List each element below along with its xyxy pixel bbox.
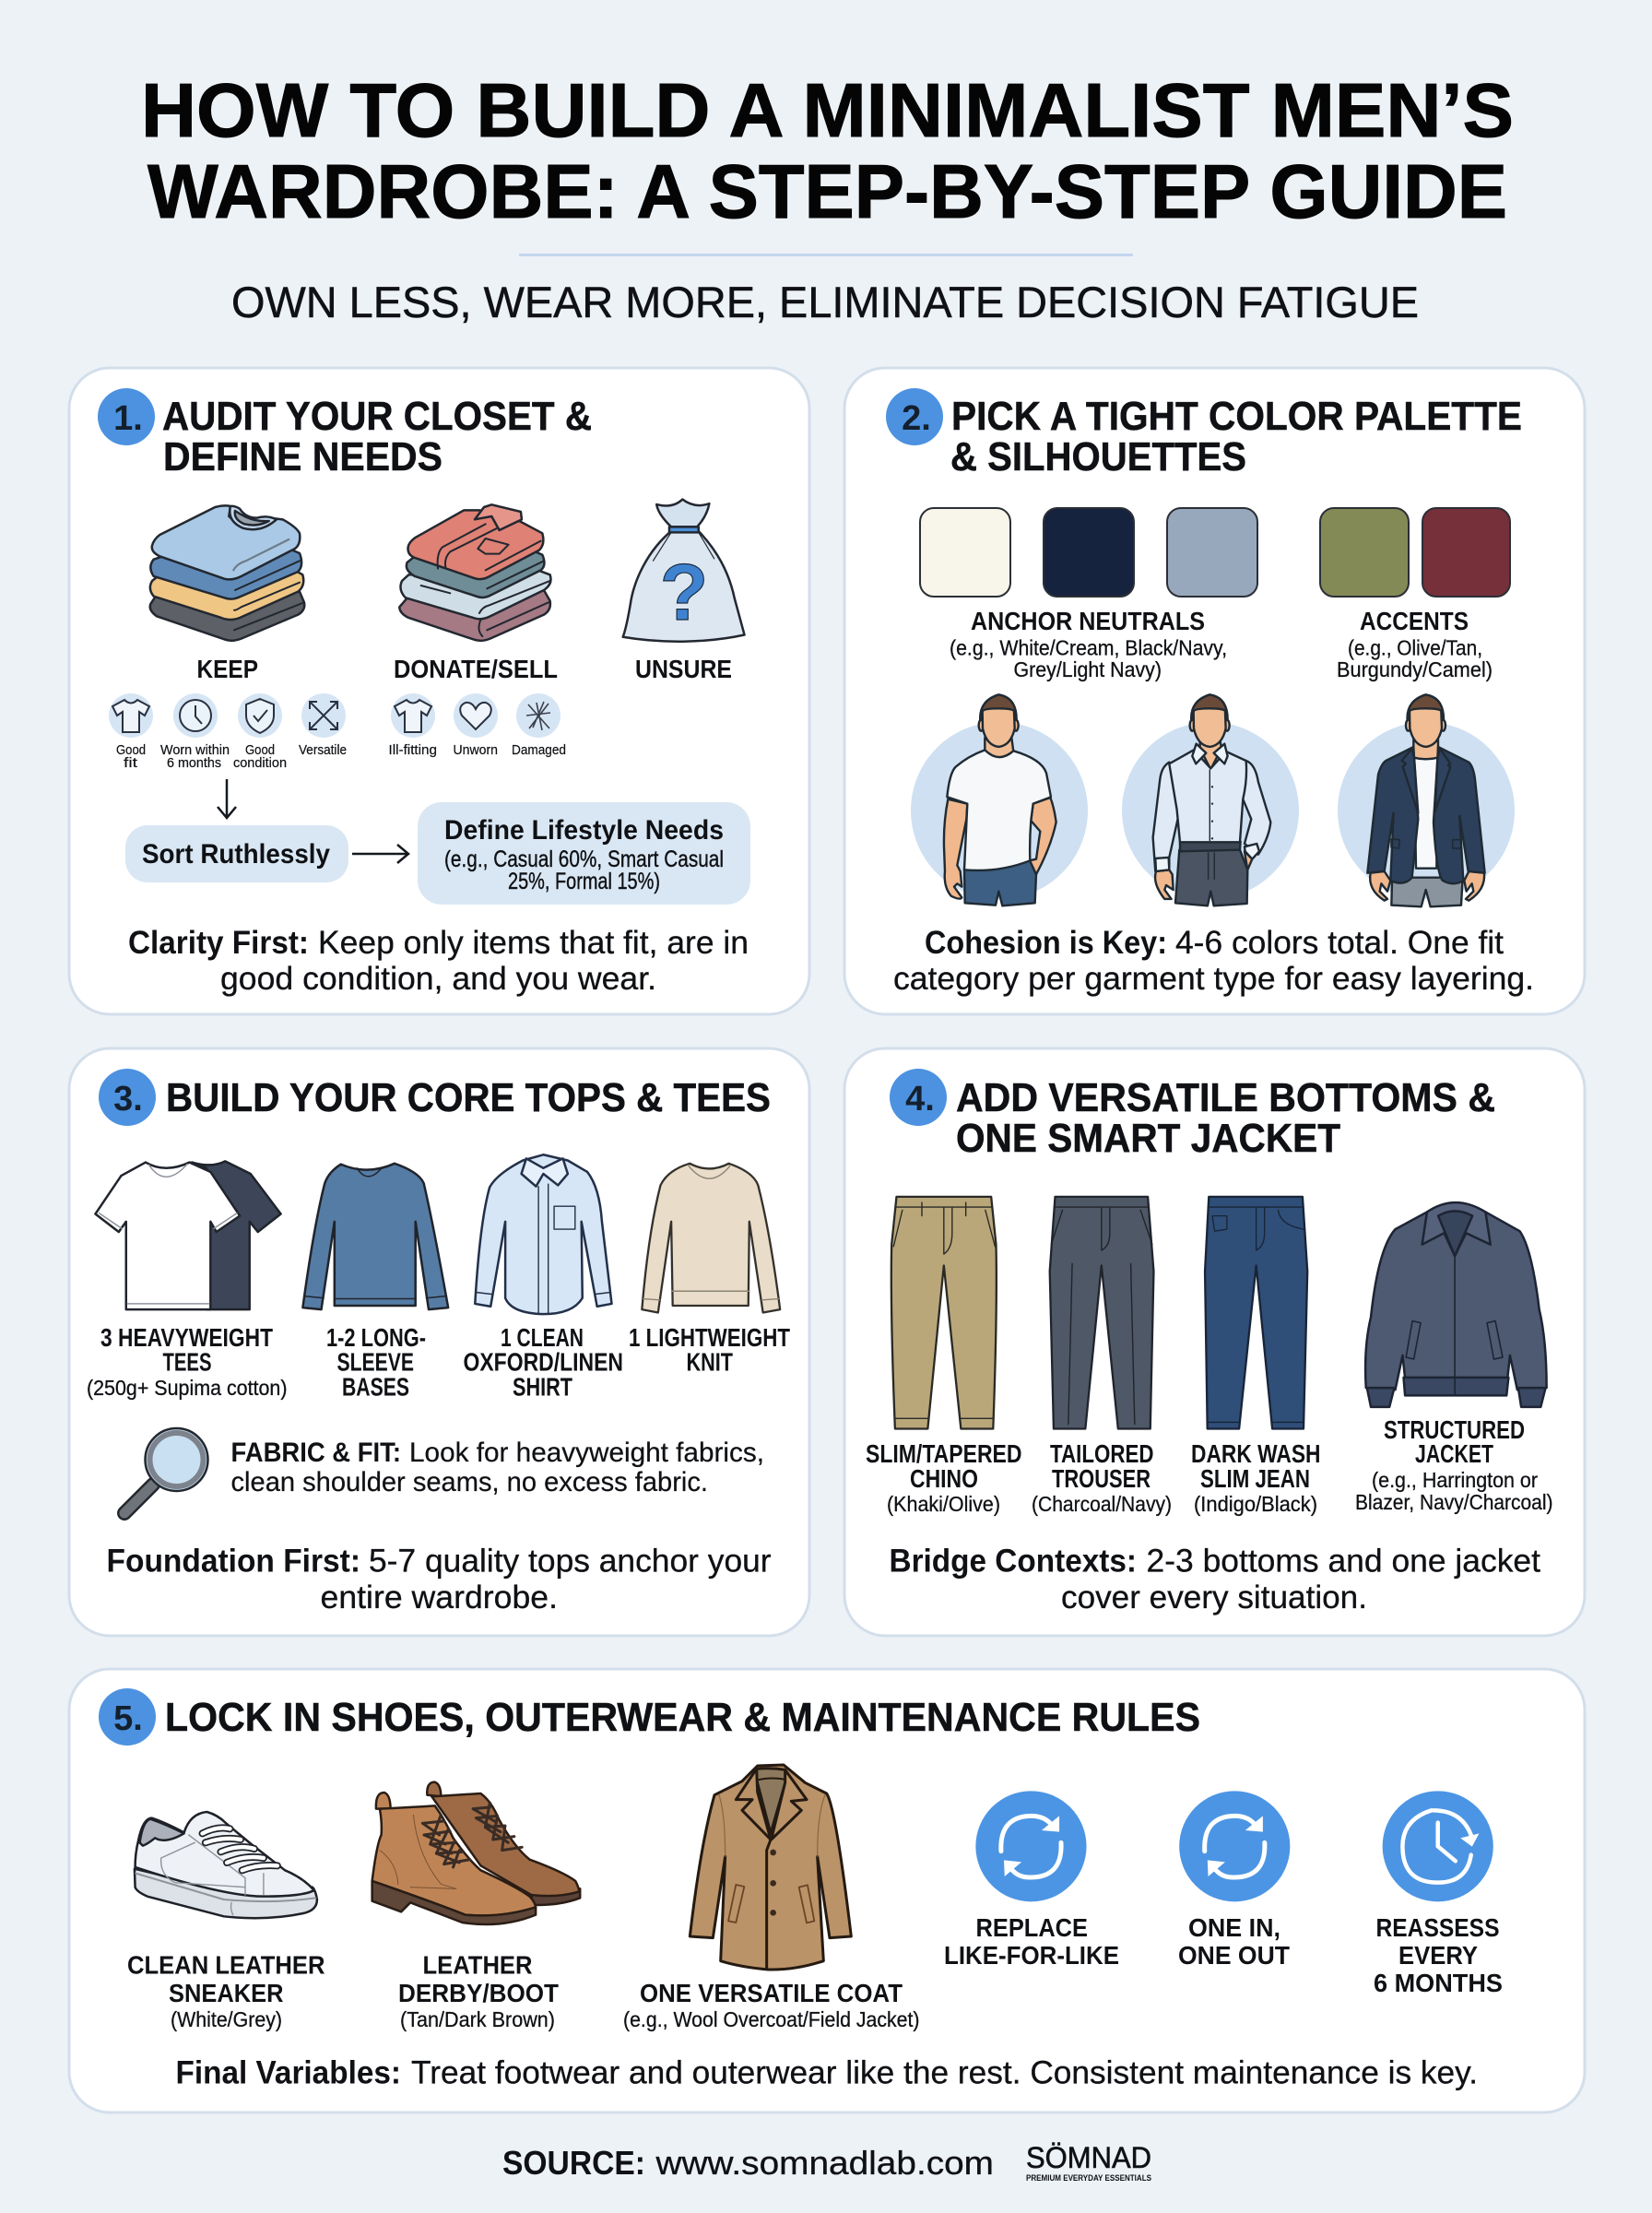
define lifestyle needs box xyxy=(418,802,750,905)
figure: casual tee xyxy=(911,694,1088,905)
panel 4 takeaway: cover every situation. xyxy=(1061,1580,1367,1615)
panel 1 takeaway: good condition, and you wear. xyxy=(220,961,656,997)
anchor neutrals label: ANCHOR NEUTRALS xyxy=(971,607,1205,635)
chino labels xyxy=(866,1439,1021,1516)
title: HOW TO BUILD A MINIMALIST MEN’S xyxy=(141,67,1514,153)
figure: blazer xyxy=(1338,694,1515,906)
brand logo: PREMIUM EVERYDAY ESSENTIALS xyxy=(1026,2173,1151,2183)
step 3 badge xyxy=(99,1069,156,1126)
chino labels: (Khaki/Olive) xyxy=(887,1492,1000,1516)
panel 4 takeaway: 2-3 bottoms and one jacket xyxy=(1147,1544,1540,1579)
step 1 heading xyxy=(162,394,592,479)
garment: structured jacket xyxy=(1365,1202,1547,1407)
icon: good fit xyxy=(109,693,153,738)
jacket labels: JACKET xyxy=(1415,1439,1493,1468)
icon: replace like-for-like xyxy=(975,1791,1087,1901)
step 2 heading xyxy=(950,394,1522,479)
step 5 badge xyxy=(99,1688,156,1746)
title: WARDROBE: A STEP-BY-STEP GUIDE xyxy=(148,148,1507,234)
panel 2 takeaway: Cohesion is Key: xyxy=(925,925,1167,961)
jean labels: DARK WASH xyxy=(1191,1439,1320,1468)
panel 4 card xyxy=(844,1048,1585,1636)
subtitle: OWN LESS, WEAR MORE, ELIMINATE DECISION FATIGUE xyxy=(231,278,1419,326)
fabric and fit note xyxy=(230,1438,764,1497)
step 5 heading: LOCK IN SHOES, OUTERWEAR & MAINTENANCE RULES xyxy=(165,1695,1200,1740)
rule label: reassess: REASSESS xyxy=(1375,1913,1499,1942)
garment: heavyweight tees xyxy=(95,1161,281,1309)
long sleeve labels: BASES xyxy=(342,1372,409,1402)
define lifestyle needs box: (e.g., Casual 60%, Smart Casual xyxy=(444,846,724,872)
step 1 badge: 1. xyxy=(113,399,143,438)
panel 2 takeaway: 4-6 colors total. One fit xyxy=(1175,925,1504,961)
panel 1 takeaway: Keep only items that fit, are in xyxy=(318,925,749,961)
garment: oxford shirt xyxy=(475,1154,612,1314)
long sleeve labels xyxy=(326,1323,426,1402)
oxford labels: 1 CLEAN xyxy=(501,1323,584,1352)
coat labels: ONE VERSATILE COAT xyxy=(640,1979,903,2007)
rule label: one in one out xyxy=(1178,1913,1290,1970)
icon captions: 6 months xyxy=(167,756,221,771)
tee labels: TEES xyxy=(162,1348,212,1376)
chino labels: CHINO xyxy=(910,1464,978,1493)
icon captions: Versatile xyxy=(299,743,347,758)
icon captions: condition xyxy=(233,756,287,771)
icon captions: Good xyxy=(116,743,146,758)
boot labels: (Tan/Dark Brown) xyxy=(400,2007,555,2031)
panel 3 card xyxy=(69,1048,809,1636)
icon: unworn heart xyxy=(454,693,498,738)
panel 3 takeaway: entire wardrobe. xyxy=(321,1580,558,1615)
step 5 badge: 5. xyxy=(113,1699,143,1738)
accents label: Burgundy/Camel) xyxy=(1337,657,1493,681)
trouser labels xyxy=(1032,1439,1172,1516)
garment: long sleeve xyxy=(302,1164,448,1309)
tee labels: (250g+ Supima cotton) xyxy=(87,1376,288,1400)
step 4 badge xyxy=(890,1069,947,1126)
rule label: reassess: EVERY xyxy=(1398,1941,1478,1970)
icon: unsure bag xyxy=(623,500,745,642)
rule label: one in one out: ONE OUT xyxy=(1178,1941,1290,1970)
icon: one in one out xyxy=(1179,1791,1290,1901)
knit labels: 1 LIGHTWEIGHT xyxy=(629,1323,790,1352)
step 2 badge: 2. xyxy=(902,399,931,438)
panel: step 2 palette xyxy=(844,368,1585,1014)
rule label: replace: LIKE-FOR-LIKE xyxy=(944,1941,1119,1970)
trouser labels: TAILORED xyxy=(1050,1439,1154,1468)
icon: damaged xyxy=(516,693,560,738)
figure: smart shirt xyxy=(1122,694,1299,905)
panel 5 card xyxy=(69,1669,1585,2112)
step 2 heading: & SILHOUETTES xyxy=(950,434,1246,479)
boot labels: LEATHER xyxy=(422,1951,533,1979)
rule label: replace: REPLACE xyxy=(975,1913,1088,1942)
column labels xyxy=(197,655,732,683)
panel 3 takeaway: Foundation First: xyxy=(107,1544,360,1579)
step 4 badge: 4. xyxy=(905,1080,935,1118)
panel: step 3 tops xyxy=(69,1048,809,1636)
anchor neutrals label xyxy=(950,607,1227,681)
jacket labels xyxy=(1355,1415,1552,1514)
panel 1 takeaway: Clarity First: xyxy=(128,925,309,961)
garment: chino xyxy=(891,1197,997,1428)
icon: wool coat xyxy=(690,1765,851,1970)
boot labels: DERBY/BOOT xyxy=(398,1979,559,2007)
sneaker labels: CLEAN LEATHER xyxy=(127,1951,325,1979)
icon captions: Worn within xyxy=(160,743,230,758)
panel 1 card xyxy=(69,368,809,1014)
trouser labels: (Charcoal/Navy) xyxy=(1032,1492,1172,1516)
jacket labels: (e.g., Harrington or xyxy=(1372,1468,1538,1492)
anchor neutrals label: Grey/Light Navy) xyxy=(1014,657,1162,681)
boot labels xyxy=(398,1951,559,2031)
column labels: DONATE/SELL xyxy=(394,655,558,683)
step 4 heading xyxy=(956,1075,1495,1161)
icon: clock xyxy=(173,693,218,738)
step 1 heading: DEFINE NEEDS xyxy=(163,434,442,479)
icon: versatile arrows xyxy=(301,693,346,738)
column labels: UNSURE xyxy=(635,655,732,683)
sneaker labels: SNEAKER xyxy=(169,1979,284,2007)
rule label: one in one out: ONE IN, xyxy=(1188,1913,1280,1942)
column labels: KEEP xyxy=(197,655,258,683)
sneaker labels xyxy=(127,1951,325,2031)
icon captions: Damaged xyxy=(512,743,566,758)
jacket labels: Blazer, Navy/Charcoal) xyxy=(1355,1490,1552,1514)
step 4 heading: ONE SMART JACKET xyxy=(956,1116,1340,1161)
define lifestyle needs box: Define Lifestyle Needs xyxy=(444,815,724,846)
jacket labels: STRUCTURED xyxy=(1384,1415,1525,1444)
sneaker labels: (White/Grey) xyxy=(171,2007,282,2031)
panel 4 takeaway xyxy=(889,1544,1540,1615)
panel 1 takeaway xyxy=(128,925,749,997)
icon: magnifying glass xyxy=(124,1428,208,1513)
knit labels xyxy=(629,1323,790,1376)
accents label xyxy=(1337,607,1493,681)
panel 3 takeaway xyxy=(107,1544,772,1615)
rule label: reassess xyxy=(1374,1913,1503,1997)
icon captions xyxy=(116,743,566,771)
long sleeve labels: SLEEVE xyxy=(337,1348,414,1376)
panel: step 5 shoes and rules xyxy=(69,1669,1585,2112)
icon: shield xyxy=(238,693,282,738)
icon captions: Good xyxy=(245,743,275,758)
panel 2 takeaway xyxy=(893,925,1534,997)
jean labels: (Indigo/Black) xyxy=(1194,1492,1317,1516)
garment: knit xyxy=(642,1164,780,1312)
arrow: to lifestyle needs xyxy=(352,845,408,863)
icon: donate clothes stack xyxy=(399,504,550,641)
tee labels: 3 HEAVYWEIGHT xyxy=(100,1323,273,1352)
step 3 badge: 3. xyxy=(113,1080,143,1118)
panel 5 takeaway: Treat footwear and outerwear like the rest. Consistent maintenance is key. xyxy=(411,2054,1478,2091)
trouser labels: TROUSER xyxy=(1052,1464,1150,1493)
step 3 heading: BUILD YOUR CORE TOPS & TEES xyxy=(166,1075,771,1120)
oxford labels xyxy=(463,1323,623,1402)
garment: jean xyxy=(1205,1197,1307,1428)
source footer xyxy=(502,2144,994,2182)
long sleeve labels: 1-2 LONG- xyxy=(326,1323,426,1352)
title xyxy=(141,67,1514,234)
accents label: (e.g., Olive/Tan, xyxy=(1348,636,1482,660)
icon captions: Ill-fitting xyxy=(389,743,437,758)
step 1 badge xyxy=(98,388,155,445)
icon captions: fit xyxy=(124,756,137,771)
rule label: reassess: 6 MONTHS xyxy=(1374,1969,1503,1997)
step 2 heading: PICK A TIGHT COLOR PALETTE xyxy=(951,394,1522,439)
anchor neutrals label: (e.g., White/Cream, Black/Navy, xyxy=(950,636,1227,660)
fabric and fit note: Look for heavyweight fabrics, xyxy=(409,1438,764,1468)
icon: reassess clock xyxy=(1383,1791,1493,1901)
icon captions: Unworn xyxy=(454,743,498,758)
tee labels xyxy=(87,1323,288,1400)
jean labels xyxy=(1191,1439,1320,1516)
oxford labels: SHIRT xyxy=(513,1372,572,1402)
accents label: ACCENTS xyxy=(1360,607,1469,635)
colour swatches xyxy=(920,508,1510,597)
define lifestyle needs box: 25%, Formal 15%) xyxy=(508,869,660,894)
arrow: down to sort xyxy=(218,779,236,818)
jean labels: SLIM JEAN xyxy=(1200,1464,1310,1493)
icon: unsure bag: ? xyxy=(660,549,708,637)
panel 5 takeaway: Final Variables: xyxy=(175,2054,401,2091)
fabric and fit note: FABRIC & FIT: xyxy=(230,1438,401,1468)
panel 2 takeaway: category per garment type for easy layering. xyxy=(893,961,1534,997)
step 2 badge xyxy=(886,388,943,445)
panel 3 takeaway: 5-7 quality tops anchor your xyxy=(369,1544,772,1579)
coat labels xyxy=(623,1979,920,2031)
panel 2 card xyxy=(844,368,1585,1014)
icon: leather sneaker xyxy=(135,1812,317,1918)
step 1 heading: AUDIT YOUR CLOSET & xyxy=(162,394,592,439)
step 4 heading: ADD VERSATILE BOTTOMS & xyxy=(956,1075,1495,1120)
oxford labels: OXFORD/LINEN xyxy=(463,1348,623,1376)
icon: leather boots xyxy=(372,1782,580,1924)
sort ruthlessly pill: Sort Ruthlessly xyxy=(142,839,330,870)
rule label: replace xyxy=(944,1913,1119,1970)
garment: trouser xyxy=(1050,1197,1153,1428)
panel 4 takeaway: Bridge Contexts: xyxy=(889,1544,1137,1579)
knit labels: KNIT xyxy=(686,1348,733,1376)
source footer: SOURCE: xyxy=(502,2144,645,2182)
source footer: www.somnadlab.com xyxy=(655,2144,994,2182)
icon: ill-fitting xyxy=(391,693,435,738)
brand logo: SÖMNAD xyxy=(1026,2141,1151,2174)
panel: step 4 bottoms xyxy=(844,1048,1585,1636)
sort ruthlessly pill xyxy=(125,825,348,882)
coat labels: (e.g., Wool Overcoat/Field Jacket) xyxy=(623,2007,920,2031)
fabric and fit note: clean shoulder seams, no excess fabric. xyxy=(230,1467,708,1497)
icon: keep clothes stack xyxy=(150,505,304,641)
chino labels: SLIM/TAPERED xyxy=(866,1439,1021,1468)
panel: step 1 audit closet xyxy=(69,368,809,1014)
